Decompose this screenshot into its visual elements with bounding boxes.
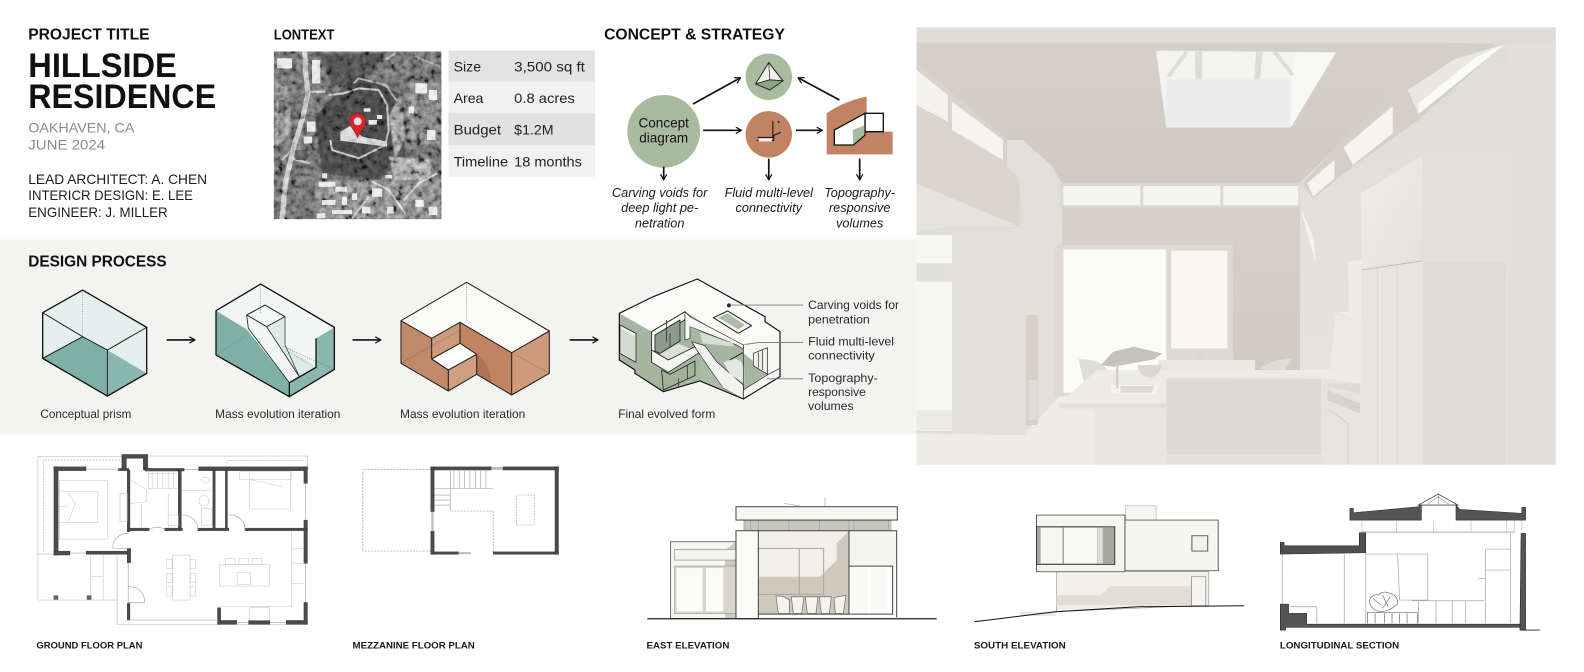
mezzanine floor plan	[363, 467, 559, 554]
project data table: 18 months	[514, 154, 582, 170]
concept heading: CONCEPT & STRATEGY	[604, 26, 785, 43]
concept captions: deep light pe-	[621, 200, 698, 215]
concept captions: Carving voids for	[612, 185, 708, 200]
interior render	[916, 27, 1574, 467]
project name heading	[28, 47, 216, 116]
longitudinal section	[1280, 494, 1540, 630]
aerial site map	[274, 50, 441, 220]
icon: circulation circle	[746, 111, 792, 158]
wall outline	[54, 454, 307, 624]
callout text	[808, 300, 899, 413]
project data table	[449, 51, 595, 177]
concept captions	[612, 185, 895, 230]
panel: concept and strategy	[604, 26, 895, 230]
panel: design process	[0, 239, 916, 434]
final evolved form	[619, 279, 780, 399]
process labels: Conceptual prism	[40, 409, 131, 421]
callout text: responsive	[808, 387, 866, 399]
drawing captions: EAST ELEVATION	[647, 641, 730, 652]
panel: context	[274, 27, 595, 220]
process labels	[40, 409, 715, 421]
concept diagram circle: diagram	[639, 130, 688, 145]
project data table: $1.2M	[514, 121, 554, 137]
process labels: Mass evolution iteration	[215, 409, 340, 421]
context heading: LONTEXT	[274, 27, 334, 43]
drawing captions: LONGITUDINAL SECTION	[1280, 641, 1399, 652]
drawing captions: SOUTH ELEVATION	[974, 641, 1066, 652]
location and date: OAKHAVEN, CA	[28, 120, 135, 135]
callout text: connectivity	[808, 351, 875, 363]
project data table: Size	[454, 59, 481, 75]
concept captions: responsive	[829, 200, 890, 215]
south elevation	[974, 506, 1244, 622]
east elevation	[647, 497, 937, 619]
project team: LEAD ARCHITECT: A. CHEN	[28, 172, 207, 187]
icon: topography volume	[827, 97, 893, 154]
plant and seating	[1368, 592, 1418, 623]
process labels: Mass evolution iteration	[400, 409, 525, 421]
concept diagram circle	[627, 95, 700, 168]
mass iteration two	[401, 282, 549, 395]
callout text: penetration	[808, 314, 870, 326]
location and date: JUNE 2024	[28, 138, 105, 153]
project name heading: RESIDENCE	[28, 78, 216, 116]
drawing captions: GROUND FLOOR PLAN	[36, 641, 143, 652]
mass iteration one	[216, 284, 334, 397]
drawing captions: MEZZANINE FLOOR PLAN	[353, 641, 475, 652]
arrows between concept nodes	[664, 78, 860, 180]
terrace dashes	[43, 460, 304, 552]
project name heading: HILLSIDE	[28, 47, 177, 85]
concept captions: connectivity	[736, 200, 803, 215]
site boundary	[38, 456, 307, 624]
project data table: Budget	[454, 121, 501, 137]
conceptual prism	[43, 290, 147, 396]
location and date	[28, 120, 135, 153]
project data table: 3,500 sq ft	[514, 59, 585, 75]
concept captions: Topography-	[824, 185, 895, 200]
project team	[28, 172, 207, 220]
project title label: PROJECT TITLE	[28, 26, 150, 43]
callout leader lines	[729, 305, 803, 379]
drawing captions	[36, 641, 1399, 652]
icon: map pin	[350, 113, 366, 138]
concept captions: Fluid multi-level	[725, 185, 814, 200]
panel: project info	[28, 26, 216, 220]
project data table: 0.8 acres	[514, 90, 575, 106]
process arrows	[167, 339, 598, 341]
callout text: volumes	[808, 401, 854, 413]
project data table: Area	[454, 90, 484, 106]
glazing and doors	[70, 469, 306, 622]
concept captions: netration	[635, 215, 684, 230]
ground floor plan	[38, 454, 307, 624]
project team: ENGINEER: J. MILLER	[28, 205, 168, 220]
callout text: Fluid multi-level	[808, 336, 894, 348]
callout text: Carving voids for	[808, 300, 899, 312]
furniture	[59, 470, 304, 620]
dining chairs	[776, 595, 846, 613]
process heading: DESIGN PROCESS	[28, 254, 167, 271]
icon: light void circle	[746, 54, 792, 100]
process labels: Final evolved form	[618, 409, 715, 421]
project data table: Timeline	[454, 154, 508, 170]
callout text: Topography-	[808, 373, 878, 385]
concept diagram circle: Concept	[639, 115, 689, 130]
concept captions: volumes	[836, 215, 884, 230]
terrace posts	[54, 595, 91, 600]
project team: INTERICR DESIGN: E. LEE	[28, 188, 193, 203]
